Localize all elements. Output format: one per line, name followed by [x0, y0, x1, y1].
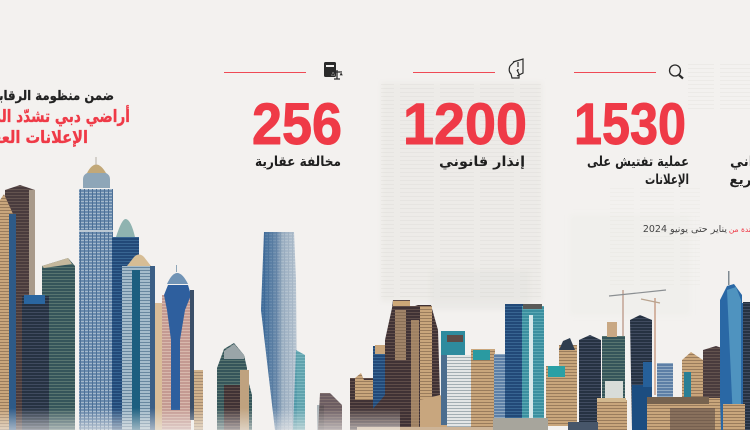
stat: 1200 legal warnings [403, 59, 527, 170]
date note: يناير حتى يونيو 2024 [643, 224, 727, 235]
icon: hand holding warning card [509, 59, 523, 78]
skyline: left tower cluster [0, 157, 342, 430]
headline block [0, 89, 130, 148]
maroon tower [703, 346, 722, 403]
teal-top mid tower [546, 366, 572, 426]
tower beside cayan [293, 350, 305, 430]
tan teal-top tower [471, 349, 495, 430]
dark tower [579, 335, 601, 425]
black and blue tower [630, 315, 652, 430]
blue tower at right edge [720, 271, 750, 430]
dark blue slab [373, 345, 385, 430]
tan slim tower [155, 303, 163, 430]
tan low block [597, 398, 627, 430]
stat: 256 property violations [224, 62, 343, 170]
label: الإعلانات [645, 172, 689, 188]
slim blue tower [494, 354, 506, 424]
twisted cayan tower [261, 232, 297, 430]
banded centre tower [122, 254, 155, 430]
stat: clipped project inspections label [729, 154, 750, 188]
divider line [413, 72, 495, 73]
label: إنذار قانوني [439, 154, 525, 170]
navy teal tower [505, 304, 544, 422]
cranes [609, 290, 666, 395]
green tower [42, 258, 75, 430]
tall marina tower [79, 157, 113, 430]
stepped brown towers [350, 373, 374, 430]
blue distant tower [657, 363, 673, 399]
tan low right block [723, 404, 745, 430]
teal dark tower with tan cap [602, 322, 625, 402]
small gold tower [194, 370, 203, 430]
number: 256 [252, 92, 342, 157]
skyline: right building cluster [350, 271, 750, 430]
label: مخالفة عقارية [255, 154, 341, 170]
divider line [224, 72, 306, 73]
brown tower [5, 185, 35, 430]
ground mist fade [0, 408, 400, 430]
label [587, 154, 689, 188]
icon: law book and scales [324, 62, 343, 79]
divider line [574, 72, 656, 73]
low distant buildings [317, 393, 342, 430]
number: 1530 [574, 92, 686, 157]
teal white tower [441, 331, 471, 430]
tan tower with dark top [559, 338, 577, 422]
tan and teal tower [682, 352, 706, 399]
big stepped tower [372, 300, 453, 430]
pink and blue tower [162, 265, 194, 430]
stat: 1530 ad inspections [574, 65, 689, 188]
base podium strip [357, 418, 598, 430]
front tan and blue tower [0, 194, 16, 430]
label: عملية تفتيش على [587, 154, 689, 170]
number: 1200 [403, 92, 527, 157]
teal dome tower [112, 219, 139, 430]
dark blue front tower [22, 295, 49, 430]
icon: magnifier [670, 65, 683, 78]
crowned tower [217, 343, 252, 430]
long tan podium [647, 397, 723, 430]
